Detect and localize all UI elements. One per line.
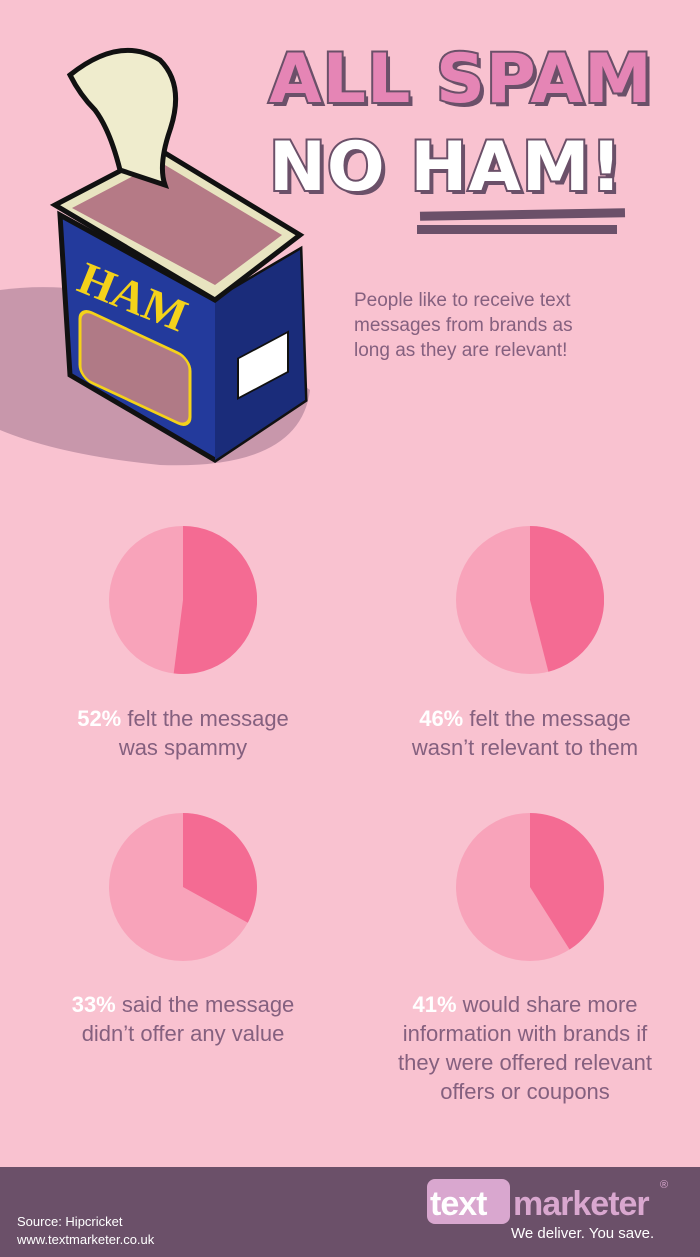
caption 4: information with brands if — [403, 1021, 647, 1046]
pie 2 — [456, 526, 604, 674]
caption 2: 46% felt the message — [419, 706, 631, 731]
label: HAM — [71, 252, 195, 341]
title: NO HAM! — [269, 128, 623, 207]
intro text: People like to receive text messages from brands as long as they are relevant! — [354, 290, 573, 361]
title — [266, 40, 653, 234]
illustration: ham can — [0, 48, 310, 466]
caption 4: they were offered relevant — [398, 1050, 652, 1075]
caption 4: 41% would share more — [412, 992, 638, 1017]
footer — [0, 1167, 700, 1257]
pie 4 — [456, 813, 604, 961]
source — [17, 1214, 154, 1247]
caption 2: wasn’t relevant to them — [412, 735, 638, 760]
shadow — [0, 287, 310, 465]
logo: We deliver. You save. — [511, 1225, 654, 1242]
logo — [427, 1179, 668, 1242]
caption 4: offers or coupons — [440, 1079, 610, 1104]
caption 1 — [77, 706, 289, 760]
logo: marketer — [513, 1185, 649, 1223]
caption 4 — [398, 992, 652, 1104]
can body — [60, 215, 305, 460]
caption 3: 33% said the message — [72, 992, 294, 1017]
logo: text — [430, 1185, 486, 1223]
logo: ® — [660, 1179, 668, 1191]
can top — [55, 150, 300, 300]
caption 3: didn’t offer any value — [82, 1021, 284, 1046]
source: www.textmarketer.co.uk — [17, 1232, 154, 1247]
caption 3 — [72, 992, 294, 1046]
caption 2 — [412, 706, 638, 760]
pie 3 — [109, 813, 257, 961]
source: Source: Hipcricket — [17, 1214, 122, 1229]
title: ALL SPAM — [269, 40, 653, 119]
caption 1: 52% felt the message — [77, 706, 289, 731]
caption 1: was spammy — [119, 735, 247, 760]
lid — [70, 50, 176, 185]
pie 1 — [109, 526, 257, 674]
